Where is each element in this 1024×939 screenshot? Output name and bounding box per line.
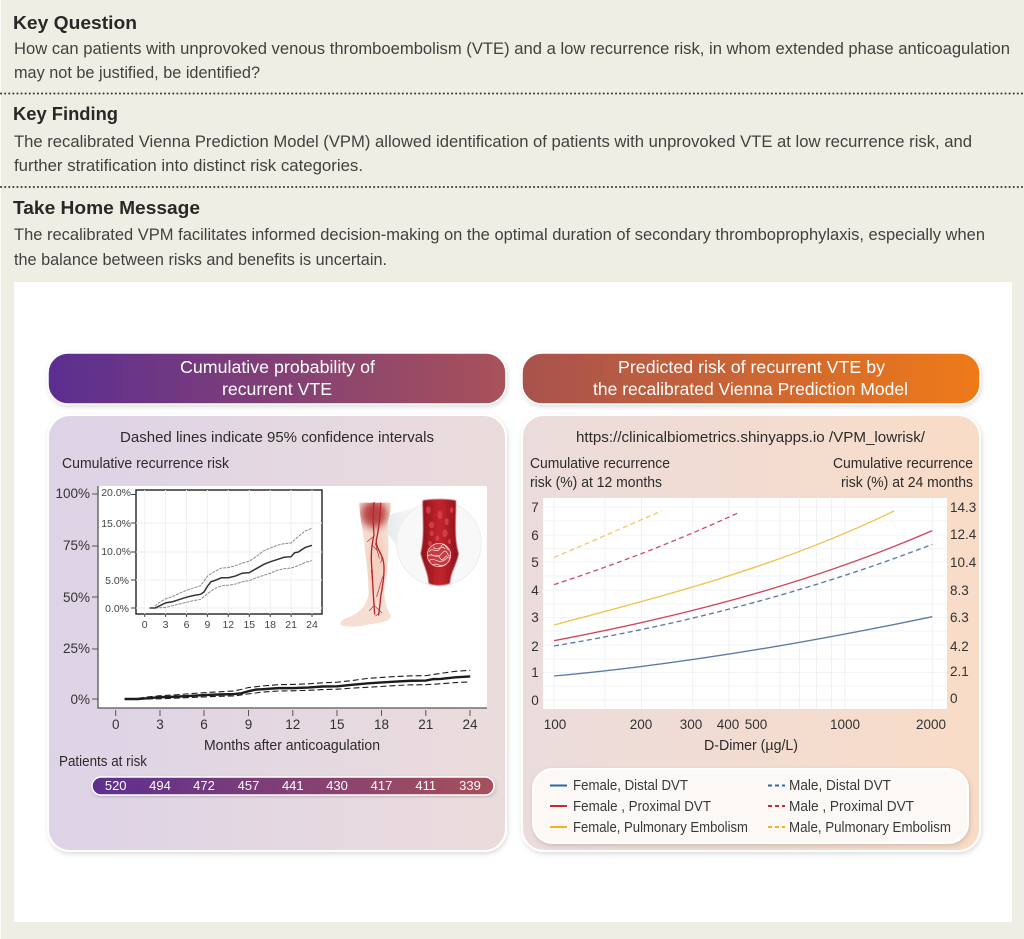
header: cumulative probability: Cumulative probability of: [180, 357, 375, 377]
legend: female distal DVT: Female, Distal DVT: [573, 778, 688, 794]
chart: main survival curve: 50%: [63, 590, 90, 605]
chart: risk by D-dimer: 100: [544, 717, 566, 732]
chart: main survival curve: [55, 486, 487, 732]
chart: risk by D-dimer: 0: [531, 693, 539, 708]
panel: predicted risk: [522, 415, 980, 851]
chart: risk by D-dimer: 2000: [916, 717, 946, 732]
legend: male pulmonary embolism: Male, Pulmonary Embolism: [789, 820, 951, 836]
chart: risk by D-dimer: [531, 498, 977, 732]
chart: main survival curve: 24: [462, 717, 478, 732]
chart: inset zoomed curve: [101, 487, 322, 631]
patients at risk bar: 494: [149, 778, 171, 793]
chart: main survival curve: 15: [329, 717, 345, 732]
text: key finding body: [14, 133, 972, 175]
x axis title: Months after anticoagulation: [204, 738, 380, 754]
header: predicted risk: [522, 353, 980, 404]
text: key finding body: further stratification into distinct risk categories.: [14, 157, 363, 175]
right axis title: Cumulative recurrence: [833, 456, 973, 472]
note: dashed lines: Dashed lines indicate 95% confidence intervals: [120, 430, 434, 446]
chart: inset zoomed curve: 18: [264, 619, 276, 631]
curve: female proximal DVT: [554, 531, 932, 641]
curve: male proximal DVT: [554, 512, 740, 585]
heading: key finding: Key Finding: [13, 104, 118, 124]
legend: female pulmonary embolism: Female, Pulmonary Embolism: [573, 820, 748, 836]
chart: risk by D-dimer: 3: [531, 610, 539, 625]
chart: risk by D-dimer: 500: [745, 717, 767, 732]
text: take home message body: [14, 226, 985, 269]
chart: risk by D-dimer: 12.4: [950, 527, 977, 542]
web address: https://clinicalbiometrics.shinyapps.io /VPM_lowrisk/: [576, 430, 926, 446]
chart: main survival curve: 100%: [55, 486, 90, 501]
section: key finding: [13, 104, 972, 175]
chart: risk by D-dimer: 4: [531, 583, 539, 598]
text: take home message body: The recalibrated VPM facilitates informed decision-making on the optimal duration of secondary thromboprophylaxis, especially when: [14, 226, 985, 244]
chart: inset zoomed curve: 9: [204, 619, 210, 631]
section: take home message: [13, 198, 985, 269]
text: key question body: [14, 40, 1010, 82]
chart: inset zoomed curve: 0: [142, 619, 148, 631]
header: predicted risk: the recalibrated Vienna Prediction Model: [593, 379, 908, 399]
chart: main survival curve: 6: [200, 717, 208, 732]
patients at risk bar: 457: [238, 778, 259, 793]
chart: inset zoomed curve: 24: [306, 619, 318, 631]
curve: male pulmonary embolism: [554, 511, 662, 557]
text: take home message body: the balance between risks and benefits is uncertain.: [14, 251, 387, 269]
chart: risk by D-dimer: 0: [950, 691, 958, 706]
patients at risk label: Patients at risk: [59, 754, 148, 770]
panel: white figure background: [14, 282, 1012, 922]
chart: inset zoomed curve: 0.0%: [105, 603, 129, 615]
patients at risk bar: 339: [459, 778, 481, 793]
chart: main survival curve: 75%: [63, 538, 90, 553]
chart: main survival curve: 9: [245, 717, 252, 732]
x axis title: D-dimer: D-Dimer (µg/L): [704, 738, 798, 754]
heading: key question: Key Question: [13, 13, 137, 33]
chart: main survival curve: 0: [112, 717, 119, 732]
patients at risk bar: 411: [415, 778, 436, 793]
patients at risk bar: [92, 777, 494, 795]
chart: risk by D-dimer: 300: [680, 717, 702, 732]
left axis title: risk (%) at 12 months: [530, 475, 662, 491]
heading: take home message: Take Home Message: [13, 198, 200, 218]
chart: main survival curve: 12: [285, 717, 300, 732]
text: key question body: may not be justified, be identified?: [14, 64, 260, 82]
chart: risk by D-dimer: 14.3: [950, 500, 976, 515]
chart: main survival curve: 3: [156, 717, 164, 732]
right axis title: [833, 456, 973, 491]
chart: risk by D-dimer: 1000: [830, 717, 860, 732]
chart: inset zoomed curve: 21: [285, 619, 297, 631]
chart: inset zoomed curve: 15.0%: [101, 518, 131, 530]
chart: risk by D-dimer: 400: [717, 717, 739, 732]
chart: main survival curve: 18: [374, 717, 389, 732]
patients at risk bar: 441: [282, 778, 304, 793]
curve: female distal DVT: [554, 617, 932, 676]
chart: inset zoomed curve: 20.0%: [101, 487, 131, 499]
header: cumulative probability: [48, 353, 506, 404]
chart: main survival curve: 25%: [63, 641, 90, 656]
chart: risk by D-dimer: 4.2: [950, 639, 969, 654]
chart: risk by D-dimer: 6.3: [950, 610, 969, 625]
curve: female pulmonary embolism: [554, 511, 894, 625]
chart: risk by D-dimer: 6: [531, 528, 539, 543]
chart: inset zoomed curve: 6: [184, 619, 190, 631]
chart: inset zoomed curve: 10.0%: [101, 546, 131, 558]
chart: risk by D-dimer: 8.3: [950, 583, 969, 598]
patients at risk bar: 520: [105, 778, 127, 793]
chart: risk by D-dimer: 2.1: [950, 664, 969, 679]
chart: inset zoomed curve: 3: [163, 619, 169, 631]
chart: risk by D-dimer: 7: [531, 500, 539, 515]
legend: female proximal DVT: Female , Proximal DVT: [573, 799, 711, 815]
patients at risk bar: 430: [326, 778, 348, 793]
header: predicted risk: Predicted risk of recurrent VTE by: [618, 357, 885, 377]
legend: [533, 769, 968, 843]
legend: male proximal DVT: Male , Proximal DVT: [789, 799, 914, 815]
legend: male distal DVT: Male, Distal DVT: [789, 778, 891, 794]
chart: main survival curve: 21: [418, 717, 433, 732]
chart: inset zoomed curve: 5.0%: [105, 575, 129, 587]
chart: main survival curve: 0%: [70, 692, 90, 707]
panel: cumulative recurrence: [48, 415, 506, 851]
header: cumulative probability: recurrent VTE: [222, 379, 332, 399]
chart: risk by D-dimer: 10.4: [950, 555, 977, 570]
icon: leg with deep vein thrombosis: [341, 499, 481, 627]
chart: risk by D-dimer: 5: [531, 555, 539, 570]
chart: risk by D-dimer: 1: [531, 665, 539, 680]
text: key question body: How can patients with unprovoked venous thromboembolism (VTE) and a low recurrence risk, in whom extended phase anticoagulation: [14, 40, 1010, 58]
chart: inset zoomed curve: 15: [243, 619, 255, 631]
left axis title: [530, 456, 670, 491]
left axis title: Cumulative recurrence: [530, 456, 670, 472]
chart: inset zoomed curve: 12: [222, 619, 234, 631]
chart: risk by D-dimer: 2: [531, 639, 539, 654]
curve: male distal DVT: [554, 544, 932, 646]
patients at risk bar: 417: [371, 778, 392, 793]
patients at risk bar: 472: [193, 778, 215, 793]
y axis title: Cumulative recurrence risk: [62, 456, 230, 472]
section: key question: [13, 13, 1010, 82]
right axis title: risk (%) at 24 months: [841, 475, 973, 491]
text: key finding body: The recalibrated Vienna Prediction Model (VPM) allowed identification of patients with unprovoked VTE at low recurrence risk, and: [14, 133, 972, 151]
chart: risk by D-dimer: 200: [630, 717, 652, 732]
